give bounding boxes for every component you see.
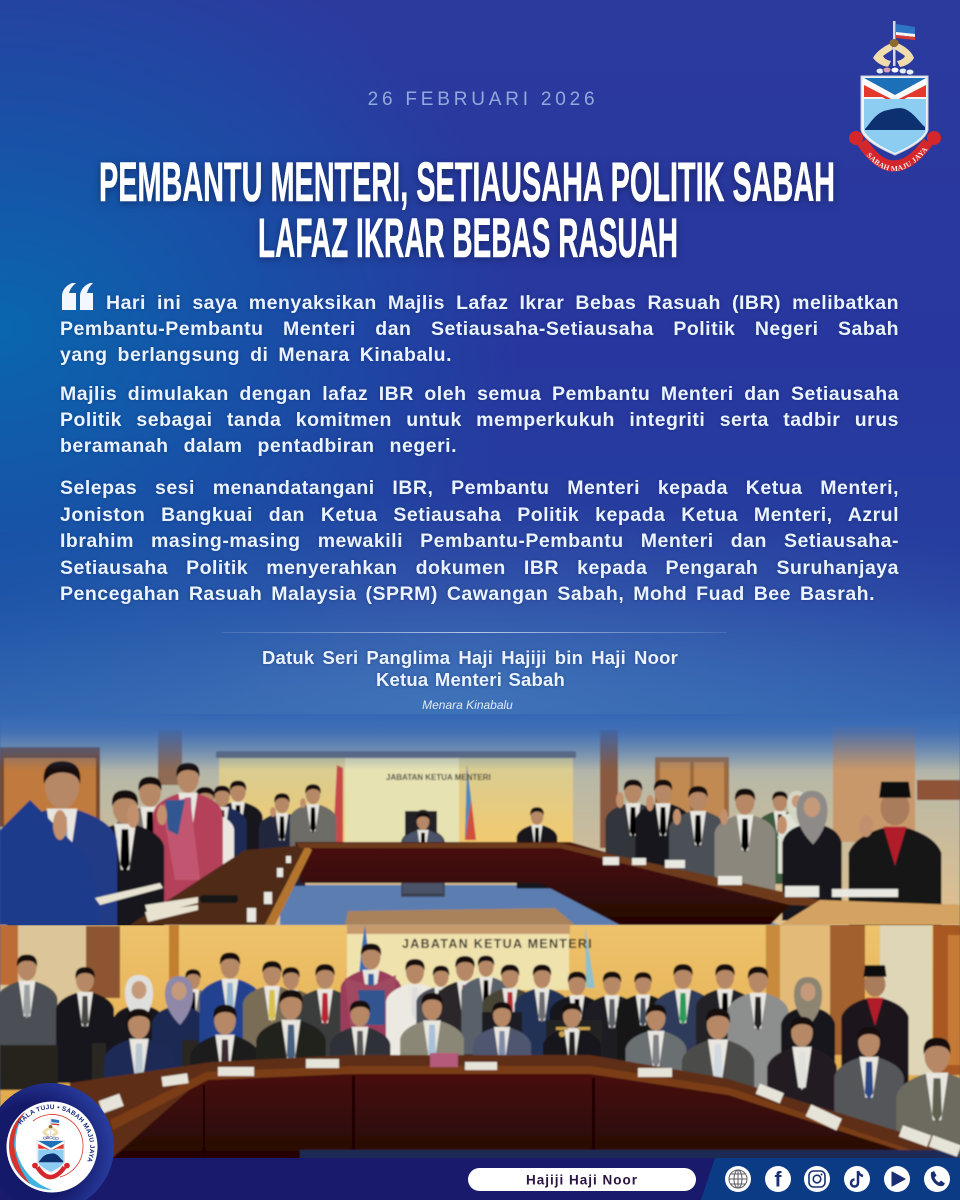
people: standing, bottom row — [0, 943, 909, 1095]
paragraph 3: Ibrahim masing-masing mewakili Pembantu-Pembantu Menteri dan Setiausaha- — [60, 530, 899, 552]
crest: Sabah coat of arms — [849, 21, 941, 172]
paragraph 1 — [60, 292, 899, 366]
attribution — [262, 647, 678, 712]
paragraph 2: Politik sebagai tanda komitmen untuk memperkukuh integriti serta tadbir urus — [60, 409, 899, 431]
top fade of photo into background — [0, 714, 960, 770]
room background — [0, 716, 960, 926]
photo: group portrait, bottom — [0, 925, 960, 1200]
logo badge: hala tuju: HALA TUJU • SABAH MAJU JAYA — [18, 1104, 94, 1162]
paragraph 1: Pembantu-Pembantu Menteri dan Setiausaha-Setiausaha Politik Negeri Sabah — [60, 318, 899, 340]
name pill — [468, 1168, 696, 1191]
raised hands — [53, 792, 873, 840]
wall sign: JABATAN KETUA MENTERI — [402, 937, 593, 951]
paragraph 2: Majlis dimulakan dengan lafaz IBR oleh semua Pembantu Menteri dan Setiausaha — [60, 383, 899, 405]
footer bar — [0, 1158, 960, 1200]
paragraph 3 — [60, 477, 899, 605]
crest: Sabah coat of arms: SABAH MAJU JAYA — [866, 148, 928, 172]
icon: youtube play — [884, 1166, 910, 1192]
date: 26 FEBRUARI 2026 — [368, 89, 598, 110]
paragraph 1: Hari ini saya menyaksikan Majlis Lafaz Ikrar Bebas Rasuah (IBR) melibatkan — [106, 292, 899, 314]
attribution: Datuk Seri Panglima Haji Hajiji bin Haji Noor — [262, 647, 678, 668]
ceremony table — [95, 842, 960, 925]
icon: phone — [924, 1166, 950, 1192]
logo badge: hala tuju — [0, 1083, 114, 1200]
icon: facebook: f — [774, 1168, 782, 1192]
icon: tiktok — [844, 1166, 870, 1192]
divider — [222, 632, 727, 633]
paragraph 1: yang berlangsung di Menara Kinabalu. — [60, 344, 452, 366]
people: seated, bottom row — [0, 990, 960, 1200]
paragraph 3: Pencegahan Rasuah Malaysia (SPRM) Cawangan Sabah, Mohd Fuad Bee Basrah. — [60, 583, 875, 605]
paragraph 3: Selepas sesi menandatangani IBR, Pembantu Menteri kepada Ketua Menteri, — [60, 477, 899, 499]
icon: facebook — [765, 1166, 791, 1192]
paragraph 3: Joniston Bangkuai dan Ketua Setiausaha Politik kepada Ketua Menteri, Azrul — [60, 504, 899, 526]
photo: ikrar ceremony, top — [0, 716, 960, 982]
attribution: Menara Kinabalu — [422, 698, 513, 712]
icon: opening quotation mark — [62, 283, 93, 310]
attribution: Ketua Menteri Sabah — [376, 669, 565, 690]
wall label: ketua menteri: JABATAN KETUA MENTERI — [386, 773, 491, 782]
boardroom table — [60, 1053, 960, 1160]
paragraph 2: beramanah dalam pentadbiran negeri. — [60, 435, 457, 457]
paragraph 3: Setiausaha Politik menyerahkan dokumen IBR kepada Pengarah Suruhanjaya — [60, 556, 899, 578]
icon: instagram — [804, 1166, 830, 1192]
paragraph 2 — [60, 383, 899, 457]
room background — [0, 925, 960, 1160]
people: standing back, top row — [0, 761, 941, 982]
main title — [99, 150, 835, 269]
name pill: Hajiji Haji Noor — [526, 1172, 638, 1188]
icon: website globe — [725, 1166, 751, 1192]
